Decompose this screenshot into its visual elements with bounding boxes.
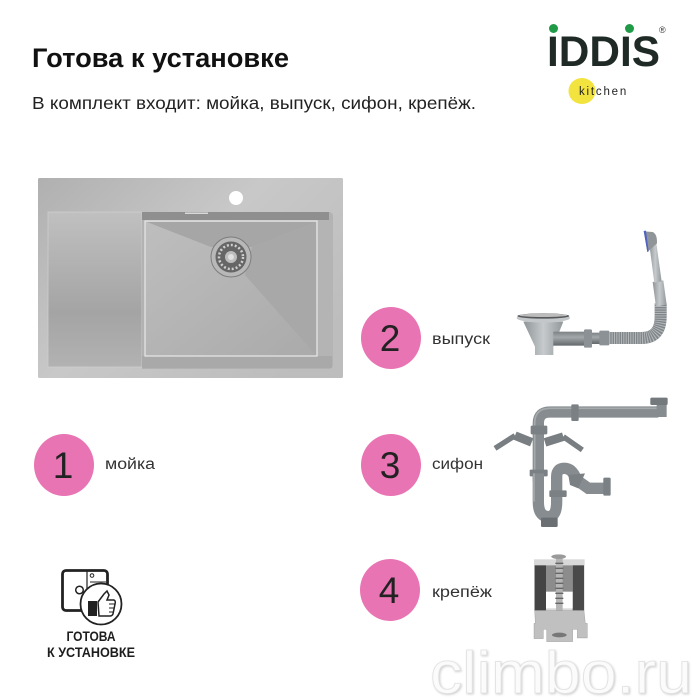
mounting bracket	[534, 554, 587, 642]
badge 2	[361, 307, 421, 369]
tap hole	[229, 191, 243, 205]
drain strainer	[211, 237, 251, 277]
logo: IDDIS kitchen	[547, 24, 666, 104]
label: мойка: мойка	[105, 456, 155, 473]
label: крепёж: крепёж	[432, 584, 493, 601]
badge 1: 1	[53, 445, 73, 486]
label: сифон: сифон	[432, 456, 483, 473]
outlet drain assembly	[517, 231, 667, 355]
caption: ready to install	[47, 629, 135, 660]
logo: IDDIS kitchen: ®	[659, 25, 666, 35]
siphon assembly	[495, 398, 668, 527]
badge 3: 3	[380, 445, 400, 486]
basin	[142, 212, 333, 369]
logo: IDDIS kitchen: kitchen	[579, 86, 628, 98]
label: выпуск: выпуск	[432, 331, 490, 348]
sink photo	[38, 178, 343, 378]
caption: ready to install: К УСТАНОВКЕ	[47, 645, 135, 660]
badge 3	[361, 434, 421, 496]
drainboard	[48, 212, 142, 367]
caption: ready to install: ГОТОВА	[66, 629, 116, 644]
icon: ready to install	[62, 570, 122, 624]
logo: IDDIS kitchen: IDDIS	[547, 28, 660, 76]
badge 4	[360, 559, 420, 621]
badge 2: 2	[380, 318, 400, 359]
subtitle text: В комплект входит: мойка, выпуск, сифон, крепёж.	[32, 93, 476, 113]
badge 1	[34, 434, 94, 496]
title: Готова к установке	[32, 43, 289, 73]
badge 4: 4	[379, 570, 399, 611]
